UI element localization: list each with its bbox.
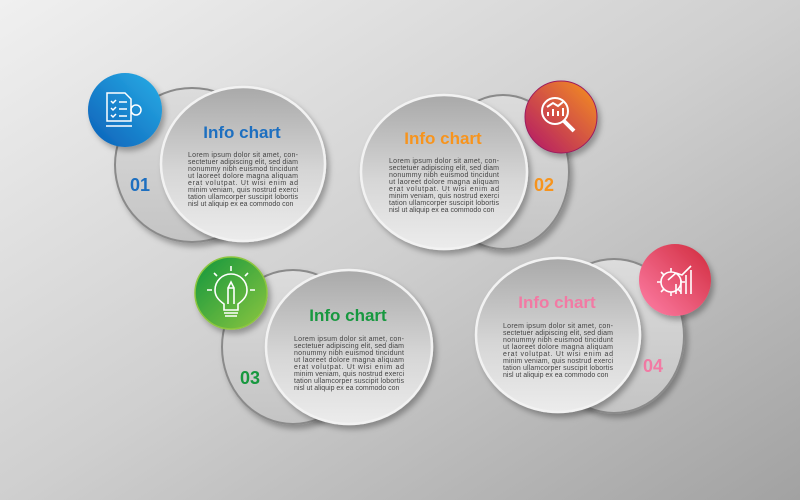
text 01: erat volutpat. Ut wisi enim ad	[188, 180, 298, 187]
text 01: sectetuer adipiscing elit, sed diam	[188, 159, 298, 166]
text 04: tation ullamcorper suscipit lobortis	[503, 365, 614, 372]
icon: gear chart	[639, 244, 711, 316]
number 02: 02	[534, 175, 554, 195]
text 04: nonummy nibh euismod tincidunt	[503, 337, 613, 344]
front disc 03	[266, 270, 432, 424]
text 03: nisl ut aliquip ex ea commodo con	[294, 385, 400, 392]
front disc 02	[361, 95, 527, 249]
text 01: ut laoreet dolore magna aliquam	[188, 173, 298, 180]
text 04: Lorem ipsum dolor sit amet, con-	[503, 323, 614, 330]
text 02: ut laoreet dolore magna aliquam	[389, 179, 499, 186]
text 03: ut laoreet dolore magna aliquam	[294, 357, 404, 364]
text 02: erat volutpat. Ut wisi enim ad	[389, 186, 499, 193]
icon: magnifier chart	[525, 81, 597, 153]
back ellipse 03	[222, 270, 364, 424]
number 03: 03	[240, 368, 260, 388]
panel: 03	[195, 257, 432, 424]
back ellipse 04	[544, 259, 684, 413]
text 01: minim veniam, quis nostrud exerci	[188, 187, 298, 194]
heading 03: Info chart	[309, 306, 387, 325]
text 02: tation ullamcorper suscipit lobortis	[389, 200, 500, 207]
text 03: minim veniam, quis nostrud exerci	[294, 371, 404, 378]
front disc 04	[476, 258, 640, 412]
panel: 02	[361, 81, 597, 249]
text 01: Lorem ipsum dolor sit amet, con-	[188, 152, 299, 159]
text 04: sectetuer adipiscing elit, sed diam	[503, 330, 613, 337]
text 02: nisl ut aliquip ex ea commodo con	[389, 207, 495, 214]
text 04: minim veniam, quis nostrud exerci	[503, 358, 613, 365]
heading 02: Info chart	[404, 129, 482, 148]
heading 04: Info chart	[518, 293, 596, 312]
text 01: tation ullamcorper suscipit lobortis	[188, 194, 298, 201]
text 03: Lorem ipsum dolor sit amet, con-	[294, 336, 405, 343]
text 02: sectetuer adipiscing elit, sed diam	[389, 165, 499, 172]
text 04: erat volutpat. Ut wisi enim ad	[503, 351, 613, 358]
panel: 01	[88, 73, 325, 242]
text 01: nisl ut aliquip ex ea commodo con	[188, 201, 294, 208]
icon: light bulb	[195, 257, 267, 329]
text 01: nonummy nibh euismod tincidunt	[188, 166, 298, 173]
heading 01: Info chart	[203, 123, 281, 142]
text 04: ut laoreet dolore magna aliquam	[503, 344, 613, 351]
back ellipse 02	[437, 95, 569, 249]
text 03: tation ullamcorper suscipit lobortis	[294, 378, 404, 385]
text 02: minim veniam, quis nostrud exerci	[389, 193, 499, 200]
text 02: nonummy nibh euismod tincidunt	[389, 172, 499, 179]
number 04: 04	[643, 356, 663, 376]
text 03: sectetuer adipiscing elit, sed diam	[294, 343, 404, 350]
text 02: Lorem ipsum dolor sit amet, con-	[389, 158, 500, 165]
front disc 01	[161, 87, 325, 241]
icon: checklist	[88, 73, 162, 147]
panel: 04	[476, 244, 711, 413]
number 01: 01	[130, 175, 150, 195]
back ellipse 01	[115, 88, 269, 242]
text 04: nisl ut aliquip ex ea commodo con	[503, 372, 609, 379]
text 03: nonummy nibh euismod tincidunt	[294, 350, 404, 357]
text 03: erat volutpat. Ut wisi enim ad	[294, 364, 404, 371]
